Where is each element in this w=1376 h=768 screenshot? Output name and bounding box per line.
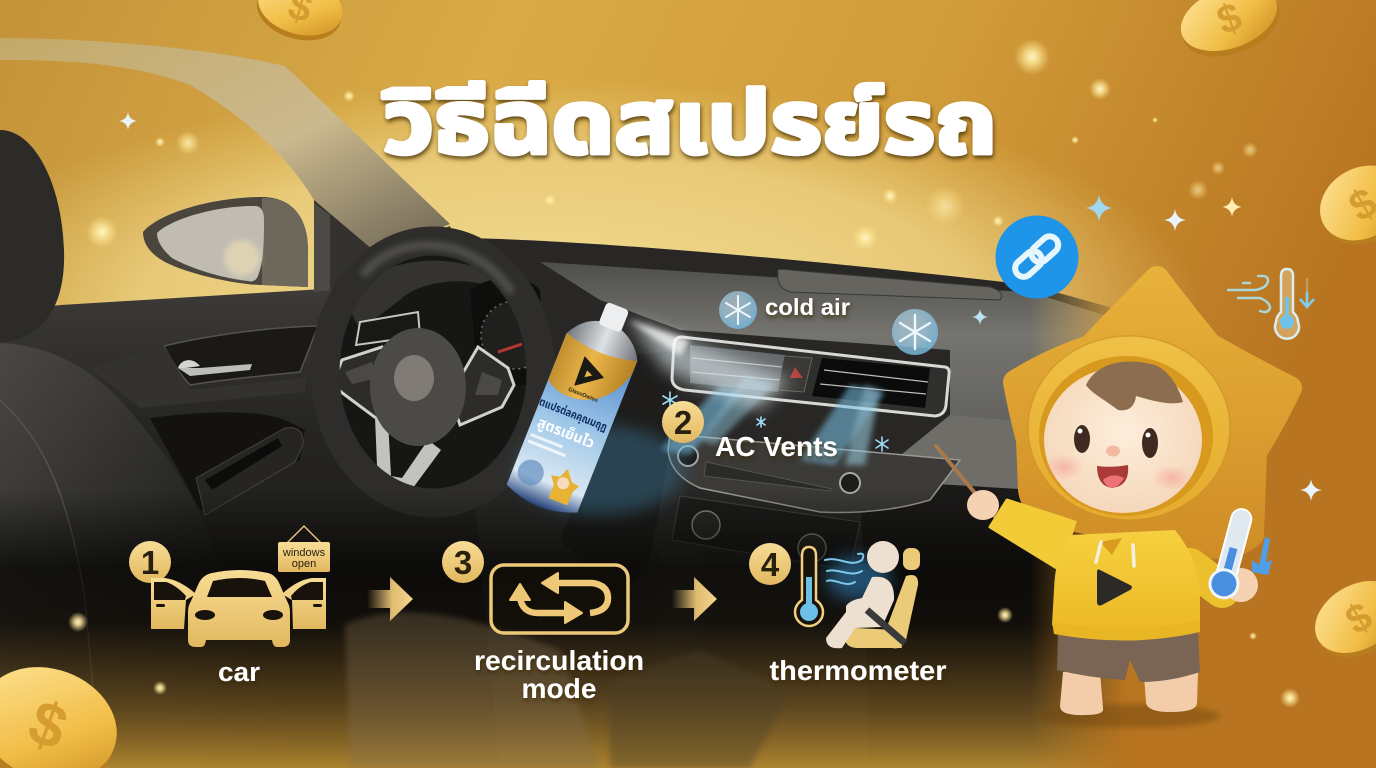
gear shifter	[655, 548, 704, 660]
badge 4	[749, 543, 791, 585]
can shoulder and cap	[564, 292, 654, 367]
door pocket and window switches	[150, 412, 305, 515]
door panel	[0, 288, 500, 768]
left arm and hand	[967, 490, 1075, 570]
icon: recirculation	[491, 565, 628, 633]
armrest and lower cabin	[345, 613, 790, 768]
rim	[325, 241, 541, 503]
coin right lower	[1302, 566, 1376, 672]
badge 3: 3	[454, 544, 472, 581]
left spoke	[340, 345, 384, 420]
badge 1	[129, 541, 171, 583]
can body	[504, 333, 637, 520]
bottom spoke	[375, 417, 441, 486]
shorts	[1057, 632, 1200, 682]
icon: cold air wind	[825, 554, 863, 584]
door handle recess	[164, 326, 318, 385]
icon: thermometer	[795, 547, 823, 626]
can gold top	[545, 333, 637, 415]
floor shadow	[1040, 704, 1220, 728]
right spoke	[450, 347, 514, 425]
badge 4: 4	[761, 546, 780, 583]
step 2: AC vents label: AC Vents	[715, 431, 838, 462]
icon: blue link badge	[996, 216, 1078, 298]
can text: ตแปรต่ลคคุณมฤฎ	[537, 394, 609, 434]
arrow: step 1 to step 3	[367, 577, 413, 621]
can mini mascot	[543, 464, 584, 507]
bokeh on right side	[1249, 632, 1300, 708]
hub airbag	[370, 328, 466, 446]
icon: seated person	[826, 541, 899, 648]
step 1: car with open doors: car	[218, 657, 261, 687]
icon: seat belt	[867, 610, 905, 643]
badge 3	[442, 541, 484, 583]
spray can	[504, 292, 654, 520]
door lower trim	[126, 346, 268, 408]
steering wheel	[325, 241, 549, 503]
cold air streams from vents	[660, 375, 885, 465]
mascot: star hooded child	[936, 278, 1290, 728]
sign: windows open	[278, 526, 330, 572]
coin bottom left	[0, 648, 133, 768]
coin bottom left: $	[20, 687, 76, 764]
eyes	[1074, 425, 1090, 453]
icon: snowflake bubble	[719, 291, 757, 329]
arrow: step 3 to step 4	[672, 577, 717, 621]
badge 2: 2	[674, 404, 692, 441]
right arm and hand	[1190, 566, 1258, 602]
icon: wind, thermometer and down arrow	[1228, 269, 1314, 339]
aerosol mist	[515, 318, 790, 515]
badge 2	[662, 401, 704, 443]
can text: สูตรเย็นไว	[534, 413, 597, 453]
callout: cold air	[719, 291, 938, 355]
center console panel with AC controls	[668, 434, 960, 570]
left vent behind wheel	[356, 312, 420, 345]
coin top	[250, 0, 349, 49]
hazard button	[778, 356, 812, 392]
callout: cold air: cold air	[765, 294, 850, 320]
side mirror	[143, 197, 308, 287]
instrument cluster	[470, 280, 540, 370]
legs	[1060, 672, 1198, 715]
step 2: AC vents label	[662, 401, 838, 462]
fade of cabin into dark and gold at the bottom	[0, 490, 1130, 768]
step 4: thermometer: thermometer	[770, 655, 947, 686]
window post	[314, 203, 330, 292]
star hood	[1015, 278, 1290, 547]
coin top right	[1172, 0, 1288, 69]
step 4: thermometer	[749, 541, 947, 686]
coin right	[1306, 151, 1376, 260]
sign: windows open: open	[292, 558, 316, 570]
blue glow behind wind	[826, 556, 890, 600]
face	[1044, 367, 1202, 513]
AC vents	[672, 337, 949, 416]
step 3: recirculation mode	[442, 541, 644, 704]
blue down arrow	[1252, 537, 1272, 575]
dashboard	[450, 238, 1120, 768]
car interior	[0, 38, 1130, 768]
pillar base dark	[314, 200, 450, 289]
mouth	[1097, 465, 1128, 488]
can text	[524, 379, 616, 467]
windshield pillar	[0, 38, 450, 254]
pointer stick	[936, 446, 994, 516]
bokeh on lower cabin	[68, 607, 1013, 695]
sign: windows open: windows	[282, 547, 326, 559]
hair	[1086, 362, 1183, 410]
nose	[1106, 446, 1120, 456]
icon: car	[151, 570, 326, 647]
hoodie	[1052, 530, 1200, 632]
icon: seat	[845, 548, 920, 648]
badge 1: 1	[141, 544, 159, 581]
small snowflakes in the air stream	[663, 392, 888, 451]
step 3: recirculation mode: recirculation	[474, 645, 644, 676]
step 3: recirculation mode: mode	[522, 673, 596, 704]
play logo	[1097, 569, 1132, 606]
can logo	[574, 357, 607, 393]
sparkles	[119, 112, 1322, 501]
cheeks	[1044, 454, 1084, 480]
hood ring	[1028, 336, 1230, 520]
title: วิธีฉีดสเปรย์รถ	[382, 73, 997, 172]
can text: GlassOwiso	[567, 387, 599, 404]
icon: snowflake bubble right	[892, 309, 938, 355]
driver seat and headrest	[0, 130, 174, 688]
step 1: car with open doors	[129, 526, 330, 687]
bokeh light dots	[86, 39, 1258, 251]
thermometer held	[1207, 506, 1257, 601]
